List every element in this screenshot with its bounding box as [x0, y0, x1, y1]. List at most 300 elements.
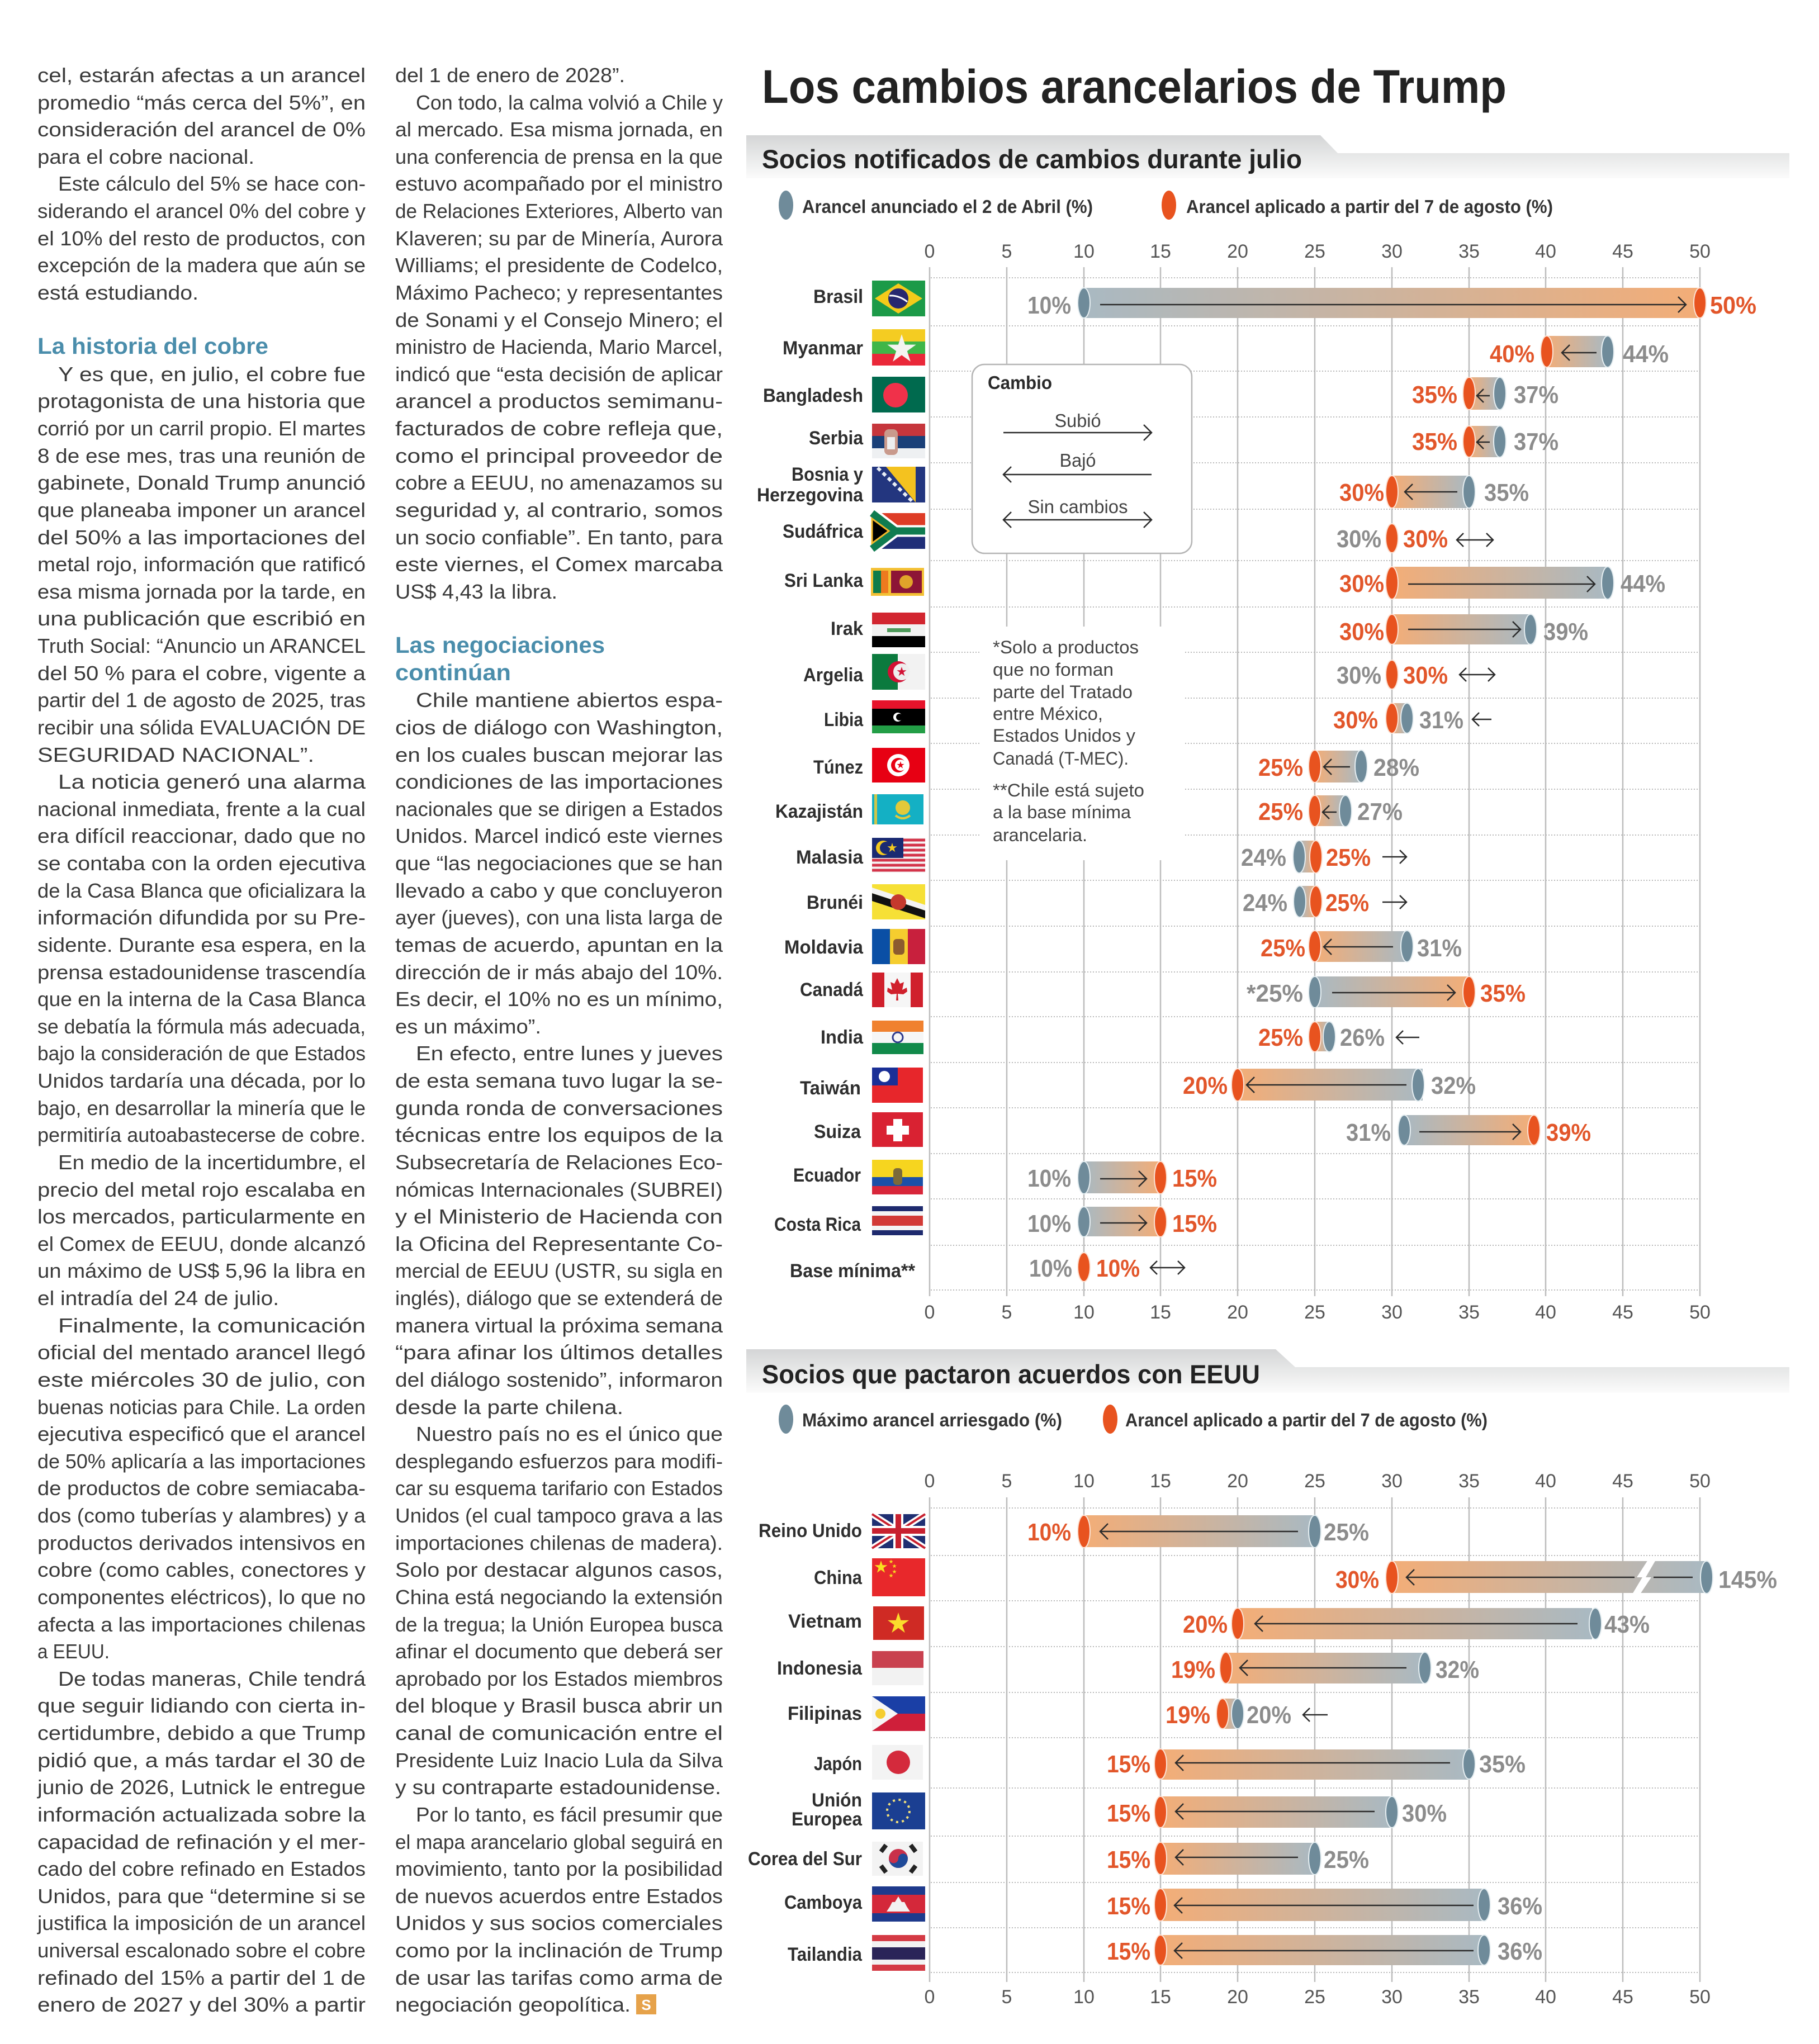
top axis: 50 — [1689, 241, 1711, 262]
row: Bosnia y Herzegovina: Bosnia y — [792, 464, 863, 485]
row: Argelia — [803, 654, 1495, 690]
bar: Reino Unido 25% to 10%: 25% — [1324, 1519, 1369, 1546]
paragraph: de todas maneras: junio de 2026, Lutnick le entregue — [37, 1776, 366, 1799]
paragraph: ronda: inglés), diálogo que se extenderá de — [395, 1287, 723, 1310]
paragraph: historia: 8 de ese mes, tras una reunión de — [37, 444, 366, 467]
paragraph: comunicación oficial: de 50% aplicaría a las importaciones — [37, 1450, 366, 1473]
bar: Ecuador 10% to 15%: 15% — [1172, 1165, 1217, 1192]
paragraph: la calma: Con todo, la calma volvió a Chile y — [416, 91, 723, 114]
paragraph: la calma: una conferencia de prensa en la que — [395, 145, 723, 168]
paragraph: otros países: aprobado por los Estados miembros — [395, 1667, 723, 1690]
marker: Sudáfrica 30% unchanged: 30% — [1403, 525, 1448, 553]
paragraph: ronda: técnicas entre los equipos de la — [395, 1123, 723, 1146]
bottom axis: 5 — [1002, 1986, 1012, 2008]
bar: Kazajistán 27% to 25% — [1258, 795, 1403, 827]
top axis — [925, 1471, 1711, 1492]
bottom axis: 35 — [1458, 1302, 1480, 1323]
paragraph: otros países: canal de comunicación entre el — [395, 1721, 723, 1744]
top axis: 45 — [1612, 1471, 1633, 1492]
paragraph: incertidumbre: el Comex de EEUU, donde alcanzó — [37, 1232, 366, 1255]
bottom axis: 45 — [1612, 1986, 1633, 2008]
paragraph: historia: que planeaba imponer un arancel — [37, 499, 366, 521]
top axis: 35 — [1458, 1471, 1480, 1492]
row: Irak — [831, 613, 1588, 647]
bar: Brunéi 24% to 25% — [1243, 886, 1406, 917]
footnotes: **Chile está sujeto — [993, 780, 1144, 800]
top axis: 25 — [1304, 241, 1325, 262]
bottom axis: 20 — [1227, 1986, 1248, 2008]
bar: Tailandia 36% to 15% — [1107, 1935, 1542, 1965]
bar: Unión Europea 30% to 15%: 15% — [1107, 1800, 1150, 1827]
paragraph: alarma: sidente. Durante esa espera, en la — [37, 933, 366, 956]
bar: Indonesia 32% to 19% — [1171, 1652, 1479, 1683]
bar: Brasil 10% to 50%: 10% — [1027, 292, 1071, 319]
paragraph: diálogo: en los cuales buscan mejorar las — [395, 743, 723, 766]
row: Bosnia y Herzegovina — [757, 464, 1529, 508]
row: Brunéi — [807, 884, 1406, 919]
paragraph: ronda: gunda ronda de conversaciones — [395, 1097, 723, 1120]
bar: Corea del Sur 25% to 15%: 25% — [1324, 1846, 1369, 1874]
bar: Filipinas 20% to 19%: 20% — [1247, 1701, 1291, 1729]
flag: Vietnam — [873, 1606, 924, 1640]
footnotes: entre México, — [993, 704, 1103, 724]
paragraph: diálogo: Es decir, el 10% no es un mínimo, — [395, 988, 723, 1011]
panel header: Socios que pactaron — [746, 1349, 1789, 1393]
paragraph: alarma: que en la interna de la Casa Blanca — [37, 988, 366, 1011]
bar: Reino Unido 25% to 10%: 10% — [1027, 1519, 1071, 1546]
paragraph: cálculo: siderando el arancel 0% del cobre y — [37, 200, 366, 222]
paragraph: diálogo: es un máximo”. — [395, 1015, 541, 1038]
marker: Base mínima 10% unchanged — [1029, 1253, 1185, 1282]
bar: Bosnia 35% to 30%: 35% — [1484, 479, 1529, 506]
row: Vietnam — [788, 1606, 1650, 1640]
paragraph: la calma: estuvo acompañado por el ministro — [395, 172, 723, 195]
row: Sudáfrica: Sudáfrica — [783, 521, 864, 542]
row: Sri Lanka — [784, 567, 1665, 599]
paragraph: la calma: US$ 4,43 la libra. — [395, 580, 557, 603]
top axis: 5 — [1002, 1471, 1012, 1492]
bar: Libia 31% to 30%: 30% — [1333, 706, 1378, 734]
top axis: 15 — [1150, 241, 1171, 262]
row: India: India — [821, 1027, 864, 1048]
bar: Ecuador 10% to 15% — [1027, 1161, 1217, 1194]
bar: Indonesia 32% to 19%: 19% — [1171, 1656, 1215, 1683]
bar: Sri Lanka 30% to 44%: 30% — [1339, 570, 1384, 597]
bar: Camboya 36% to 15%: 36% — [1498, 1893, 1542, 1920]
paragraph: comunicación oficial: cobre (como cables, conectores y — [37, 1558, 366, 1581]
paragraph: la calma: este viernes, el Comex marcaba — [395, 553, 723, 576]
paragraph: alarma: se debatía la fórmula más adecuada, — [37, 1015, 366, 1038]
top axis: 25 — [1304, 1471, 1325, 1492]
paragraph: continuation: del 1 de enero de 2028”. — [395, 64, 625, 87]
row: Ecuador — [793, 1160, 1217, 1194]
bar: Ecuador 10% to 15%: 10% — [1027, 1165, 1071, 1192]
legend box: Cambio: Cambio — [988, 372, 1052, 393]
paragraph: alarma: información difundida por su Pre- — [37, 906, 366, 929]
flag: Tailandia — [872, 1935, 925, 1971]
top axis: 20 — [1227, 1471, 1248, 1492]
bar: Canadá 25% to 35%: *25% — [1247, 980, 1303, 1007]
bottom axis: 45 — [1612, 1302, 1633, 1323]
bar: India 26% to 25% — [1258, 1022, 1419, 1052]
paragraph: otros países: Solo por destacar algunos casos, — [395, 1558, 723, 1581]
paragraph: promedio: para el cobre nacional. — [37, 145, 254, 168]
paragraph: alarma: bajo, en desarrollar la minería que le — [37, 1097, 366, 1120]
bar: Suiza 31% to 39% — [1346, 1115, 1591, 1146]
paragraph: alarma: bajo la consideración de que Estados — [37, 1042, 366, 1065]
row: Taiwán — [800, 1068, 1476, 1103]
bar: Malasia 24% to 25% — [1241, 841, 1406, 873]
paragraph: incertidumbre: precio del metal rojo escalaba en — [37, 1178, 366, 1201]
legend: chart 2 — [779, 1405, 1488, 1434]
row: Filipinas — [788, 1696, 1328, 1731]
paragraph: ronda: Subsecretaría de Relaciones Eco- — [395, 1151, 723, 1174]
paragraph: incertidumbre: el intradía del 24 de julio. — [37, 1287, 279, 1310]
paragraph: ronda: de esta semana tuvo lugar la se- — [395, 1069, 723, 1092]
row: Costa Rica — [774, 1206, 1217, 1237]
legend box: Cambio — [972, 364, 1192, 553]
bar: Unión Europea 30% to 15%: 30% — [1402, 1800, 1447, 1827]
marker: Argelia 30% unchanged — [1337, 660, 1495, 689]
bar: Libia 31% to 30%: 31% — [1419, 706, 1463, 734]
bar: Unión Europea 30% to 15% — [1107, 1796, 1447, 1828]
row: Tailandia — [788, 1935, 1542, 1971]
legend: chart 1 — [779, 191, 1553, 220]
paragraph: de todas maneras: pidió que, a más tardar el 30 de — [37, 1749, 366, 1772]
flag: Japón — [872, 1745, 923, 1780]
flag: Indonesia — [872, 1651, 923, 1685]
paragraph: historia: recibir una sólida EVALUACIÓN DE — [37, 716, 366, 739]
paragraph: comunicación oficial: dos (como tuberías y alambres) y a — [37, 1504, 366, 1527]
legend: chart 1: Arancel anunciado el 2 de Abril (%) — [802, 196, 1093, 217]
bar: Corea del Sur 25% to 15% — [1107, 1842, 1369, 1875]
footnotes: que no forman — [993, 660, 1114, 680]
paragraph: historia: Y es que, en julio, el cobre fue — [58, 363, 366, 386]
row: Brasil: Brasil — [813, 286, 863, 307]
flag: Myanmar — [872, 329, 925, 366]
paragraph: ronda: nómicas Internacionales (SUBREI) — [395, 1178, 723, 1201]
bottom axis — [925, 1986, 1711, 2008]
paragraph: otros países: importaciones chilenas de madera). — [395, 1531, 723, 1554]
flag: Brunéi — [872, 884, 925, 919]
legend: chart 1: Arancel aplicado a partir del 7 de agosto (%) — [1186, 196, 1553, 217]
bar: Costa Rica 10% to 15% — [1027, 1207, 1217, 1237]
paragraph: ronda: la Oficina del Representante Co- — [395, 1232, 723, 1255]
row: Japón: Japón — [814, 1753, 862, 1775]
flag: Filipinas — [872, 1696, 925, 1731]
bar: Brasil 10% to 50% — [1027, 288, 1756, 319]
bottom axis: 10 — [1073, 1302, 1095, 1323]
bar: India 26% to 25%: 25% — [1258, 1024, 1303, 1051]
paragraph: la calma: un socio confiable”. En tanto, para — [395, 526, 723, 549]
panel header: Socios notificados — [746, 135, 1789, 178]
paragraph: de todas maneras: que seguir lidiando con cierta in- — [37, 1694, 366, 1717]
row: Base mínima: Base mínima** — [790, 1260, 916, 1282]
row: Unión Europea: Europea — [792, 1809, 863, 1830]
paragraph: la calma: indicó que “esta decisión de aplicar — [395, 363, 723, 386]
row: Camboya — [784, 1886, 1542, 1922]
paragraph: comunicación oficial: buenas noticias para Chile. La orden — [37, 1396, 366, 1419]
bar: Canadá 25% to 35%: 35% — [1480, 980, 1526, 1007]
paragraph: otros países: Presidente Luiz Inacio Lula da Silva — [395, 1749, 723, 1772]
row: Kazajistán: Kazajistán — [775, 801, 863, 822]
footnotes: a la base mínima — [993, 802, 1131, 822]
paragraph: diálogo: nacionales que se dirigen a Estados — [395, 798, 723, 821]
row: Camboya: Camboya — [784, 1892, 863, 1913]
bar: Taiwán 32% to 20% — [1183, 1069, 1476, 1101]
row: Suiza: Suiza — [814, 1121, 861, 1142]
bar: Costa Rica 10% to 15%: 15% — [1172, 1210, 1217, 1237]
row: China: China — [814, 1567, 863, 1588]
top axis: 0 — [925, 1471, 935, 1492]
flag: Taiwán — [872, 1068, 923, 1103]
bar: Tailandia 36% to 15%: 36% — [1498, 1938, 1542, 1965]
bottom axis: 15 — [1150, 1986, 1171, 2008]
paragraph: historia — [37, 363, 366, 766]
top axis: 40 — [1535, 1471, 1556, 1492]
legend box: Cambio: Bajó — [1060, 450, 1096, 471]
paragraph: comunicación oficial: productos derivados intensivos en — [37, 1531, 366, 1554]
bottom axis: 10 — [1073, 1986, 1095, 2008]
row: Serbia: Serbia — [809, 428, 864, 449]
row: Indonesia — [777, 1651, 1479, 1685]
bar: Vietnam 43% to 20% — [1183, 1608, 1650, 1639]
row: Costa Rica: Costa Rica — [774, 1214, 861, 1235]
paragraph: la calma: como el principal proveedor de — [395, 444, 723, 467]
paragraph: otros países: China está negociando la extensión — [395, 1586, 723, 1609]
top axis: 30 — [1381, 241, 1403, 262]
paragraph: alarma: La noticia generó una alarma — [58, 770, 366, 793]
paragraph: historia: partir del 1 de agosto de 2025, tras — [37, 689, 366, 712]
paragraph: comunicación oficial: componentes eléctricos), lo que no — [37, 1586, 366, 1609]
bar: Costa Rica 10% to 15%: 10% — [1027, 1210, 1071, 1237]
row: Sri Lanka: Sri Lanka — [784, 570, 864, 591]
bar: Brasil 10% to 50%: 50% — [1710, 292, 1756, 319]
paragraph: otros países: afinar el documento que deberá ser — [395, 1640, 723, 1663]
paragraph: de todas maneras: De todas maneras, Chile tendrá — [58, 1667, 366, 1690]
row: Moldavia — [784, 929, 1462, 964]
paragraph: conclusión: de nuevos acuerdos entre Estados — [395, 1885, 723, 1908]
bar: China 145% to 30% (broken axis): 145% — [1718, 1566, 1777, 1594]
flag: Canadá — [872, 973, 923, 1007]
legend box: Cambio: Subió — [1054, 410, 1101, 431]
row: Filipinas: Filipinas — [788, 1703, 862, 1724]
paragraph: incertidumbre: los mercados, particularmente en — [37, 1205, 366, 1228]
paragraph: conclusión: el mapa arancelario global seguirá en — [395, 1830, 723, 1853]
bar: Malasia 24% to 25%: 24% — [1241, 844, 1286, 871]
bar: Moldavia 31% to 25% — [1261, 931, 1462, 962]
bar: Libia 31% to 30% — [1333, 703, 1491, 734]
footnotes: Estados Unidos y — [993, 725, 1135, 746]
paragraph: historia: Truth Social: “Anuncio un ARANCEL — [37, 634, 366, 657]
bar: Serbia 37% to 35%: 37% — [1514, 428, 1559, 456]
row: Irak: Irak — [831, 618, 863, 639]
paragraph: ronda: “para afinar los últimos detalles — [395, 1341, 723, 1364]
paragraph: de todas maneras: justifica la imposición de un arancel — [37, 1912, 366, 1934]
bar: Bosnia 35% to 30% — [1339, 476, 1529, 508]
row: Bangladesh — [763, 377, 1559, 412]
paragraph: comunicación oficial: Finalmente, la comunicación — [58, 1314, 366, 1337]
paragraph: diálogo: llevado a cabo y que concluyeron — [395, 879, 723, 902]
flag: Serbia — [872, 424, 925, 458]
flag: Sudáfrica — [872, 513, 925, 549]
paragraph: la calma: arancel a productos semimanu- — [395, 390, 723, 412]
bar: Moldavia 31% to 25%: 31% — [1417, 935, 1462, 962]
flag: Kazajistán — [872, 794, 923, 824]
paragraph: historia: protagonista de una historia que — [37, 390, 366, 412]
paragraph: promedio: cel, estarán afectas a un arancel — [37, 64, 366, 87]
top axis: 10 — [1073, 1471, 1095, 1492]
bottom axis: 50 — [1689, 1302, 1711, 1323]
paragraph: historia: gabinete, Donald Trump anunció — [37, 471, 366, 494]
heading: Las negociaciones continúan: Las negociaciones — [395, 632, 605, 658]
row: Corea del Sur — [748, 1842, 1369, 1876]
paragraph: historia: metal rojo, información que ratificó — [37, 553, 366, 576]
flag: Suiza — [872, 1112, 923, 1147]
bottom axis: 0 — [925, 1302, 935, 1323]
row: Taiwán: Taiwán — [800, 1078, 861, 1099]
paragraph: ronda — [395, 1042, 723, 1419]
paragraph: otros países — [395, 1422, 723, 1799]
top axis: 5 — [1002, 241, 1012, 262]
bar: Kazajistán 27% to 25%: 25% — [1258, 798, 1303, 826]
paragraph: alarma — [37, 770, 366, 1146]
paragraph: de todas maneras: Unidos, para que “determine si se — [37, 1885, 366, 1908]
footnotes — [993, 637, 1144, 845]
top axis: 35 — [1458, 241, 1480, 262]
paragraph: de todas maneras: universal escalonado sobre el cobre — [37, 1939, 366, 1962]
row: China — [814, 1558, 1777, 1596]
paragraph: cálculo: Este cálculo del 5% se hace con- — [58, 172, 366, 195]
paragraph: diálogo: que “las negociaciones que se han — [395, 852, 723, 875]
bottom axis: 0 — [925, 1986, 935, 2008]
paragraph: ronda: mercial de EEUU (USTR, su sigla en — [395, 1259, 723, 1282]
bar: Sri Lanka 30% to 44% — [1339, 567, 1665, 599]
paragraph: la calma: Klaveren; su par de Minería, Aurora — [395, 227, 723, 250]
paragraph: la calma: seguridad y, al contrario, somos — [395, 499, 723, 521]
paragraph: otros países: del bloque y Brasil busca abrir un — [395, 1694, 723, 1717]
paragraph: conclusión: negociación geopolítica. — [395, 1993, 631, 2016]
paragraph: conclusión: Por lo tanto, es fácil presumir que — [416, 1803, 723, 1826]
paragraph: comunicación oficial — [37, 1314, 366, 1663]
bar: Tailandia 36% to 15%: 15% — [1107, 1938, 1150, 1965]
paragraph: otros países: de la tregua; la Unión Europea busca — [395, 1613, 723, 1636]
paragraph: historia: corrió por un carril propio. El martes — [37, 417, 366, 440]
paragraph: conclusión: Unidos y sus socios comerciales — [395, 1912, 723, 1934]
paragraph: la calma — [395, 91, 723, 603]
bar: Bangladesh 37% to 35% — [1412, 377, 1559, 410]
flag: Ecuador — [872, 1160, 923, 1194]
bar: Indonesia 32% to 19%: 32% — [1436, 1656, 1479, 1683]
row: Canadá: Canadá — [800, 979, 863, 1000]
paragraph: historia: una publicación que escribió en — [37, 607, 366, 630]
footnotes: Canadá (T-MEC). — [993, 748, 1129, 769]
row: Bosnia y Herzegovina: Herzegovina — [757, 485, 864, 506]
paragraph: la calma: Máximo Pacheco; y representantes — [395, 281, 723, 304]
paragraph: otros países: desplegando esfuerzos para modifi- — [395, 1450, 723, 1473]
paragraph: diálogo: cios de diálogo con Washington, — [395, 716, 723, 739]
bar: Irak 30% to 39% — [1339, 614, 1588, 646]
footnotes: parte del Tratado — [993, 682, 1133, 702]
paragraph: promedio: consideración del arancel de 0% — [37, 118, 366, 141]
bar: Serbia 37% to 35%: 35% — [1412, 428, 1457, 456]
icon: end mark S — [636, 1994, 656, 2014]
flag: Bangladesh — [872, 377, 925, 412]
marker: Base mínima 10% unchanged: 10% — [1096, 1255, 1140, 1282]
paragraph: la calma: de Relaciones Exteriores, Alberto van — [395, 200, 723, 222]
bar: Myanmar 44% to 40% — [1490, 336, 1669, 368]
marker: Argelia 30% unchanged: 30% — [1403, 662, 1448, 689]
row: Brunéi: Brunéi — [807, 892, 863, 913]
bottom axis: 40 — [1535, 1302, 1556, 1323]
row: Libia: Libia — [824, 709, 864, 731]
bottom axis: 5 — [1002, 1302, 1012, 1323]
row: Corea del Sur: Corea del Sur — [748, 1848, 862, 1870]
bar: Reino Unido 25% to 10% — [1027, 1515, 1369, 1548]
paragraph: historia: del 50 % para el cobre, vigente a — [37, 662, 366, 685]
row: Sudáfrica — [783, 513, 1493, 553]
icon: end mark S: S — [641, 1996, 651, 2013]
bar: Vietnam 43% to 20%: 20% — [1183, 1611, 1228, 1638]
paragraph: alarma: prensa estadounidense trascendía — [37, 961, 366, 984]
chart 1: Socios notificados — [757, 241, 1756, 1323]
paragraph: de todas maneras: cado del cobre refinado en Estados — [37, 1857, 366, 1880]
paragraph: comunicación oficial: ejecutiva especificó que el arancel — [37, 1422, 366, 1445]
top axis: 15 — [1150, 1471, 1171, 1492]
row: Suiza — [814, 1112, 1591, 1147]
row: Indonesia: Indonesia — [777, 1658, 863, 1679]
paragraph: incertidumbre — [37, 1151, 366, 1310]
title: Los cambios arancelarios de Trump — [762, 60, 1507, 113]
paragraph: promedio — [37, 64, 366, 168]
footnotes: *Solo a productos — [993, 637, 1139, 657]
paragraph: comunicación oficial: este miércoles 30 de julio, con — [37, 1368, 366, 1391]
panel header: Socios notificados: Socios notificados de cambios durante julio — [762, 144, 1302, 174]
row: Argelia: Argelia — [803, 665, 864, 686]
row: Túnez — [813, 748, 1419, 782]
paragraph: la calma: facturados de cobre refleja que, — [395, 417, 723, 440]
row: Vietnam: Vietnam — [788, 1611, 862, 1632]
top axis: 0 — [925, 241, 935, 262]
paragraph: cálculo: excepción de la madera que aún se — [37, 254, 366, 277]
row: Unión Europea — [792, 1790, 1447, 1830]
row: Base mínima — [790, 1253, 1185, 1282]
paragraph: alarma: se contaba con la orden ejecutiva — [37, 852, 366, 875]
paragraph: ronda: manera virtual la próxima semana — [395, 1314, 723, 1337]
bar: Irak 30% to 39%: 39% — [1543, 618, 1588, 646]
flag: Costa Rica — [872, 1206, 923, 1235]
bar: Túnez 28% to 25%: 28% — [1373, 754, 1419, 781]
panel header: Socios que pactaron: Socios que pactaron acuerdos con EEUU — [762, 1359, 1260, 1389]
row: Myanmar — [783, 329, 1669, 368]
bar: Taiwán 32% to 20%: 20% — [1183, 1072, 1228, 1099]
row: India — [821, 1021, 1419, 1054]
chart 2: Socios que pactaron — [748, 1471, 1777, 2008]
legend: chart 2: Arancel aplicado a partir del 7 de agosto (%) — [1125, 1410, 1488, 1430]
article text: column 1 — [37, 64, 366, 2016]
paragraph: historia: del 50% a las importaciones del — [37, 526, 366, 549]
flag: Brasil — [872, 281, 925, 316]
flag: Reino Unido — [872, 1514, 925, 1548]
top axis — [925, 241, 1711, 262]
row: Moldavia: Moldavia — [784, 937, 864, 958]
paragraph: alarma: nacional inmediata, frente a la cual — [37, 798, 366, 821]
bar: Taiwán 32% to 20%: 32% — [1431, 1072, 1476, 1099]
bar: Filipinas 20% to 19% — [1166, 1699, 1328, 1729]
bar: Serbia 37% to 35% — [1412, 426, 1559, 457]
flag: Túnez — [872, 748, 925, 782]
bottom axis: 40 — [1535, 1986, 1556, 2008]
